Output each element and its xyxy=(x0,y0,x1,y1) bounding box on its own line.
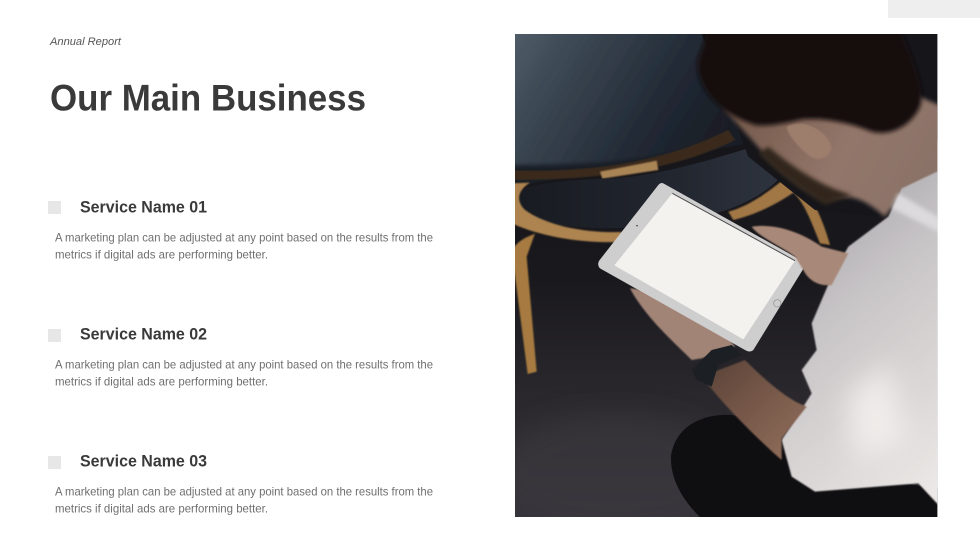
marker 01 xyxy=(48,201,61,214)
description 01: metrics if digital ads are performing better. xyxy=(55,248,268,262)
corner tab xyxy=(888,0,980,18)
watch xyxy=(692,345,742,387)
hair xyxy=(696,34,924,136)
service item 02 xyxy=(48,326,433,388)
man body xyxy=(671,34,938,517)
heading 01: Service Name 01 xyxy=(80,198,207,216)
beard xyxy=(758,147,852,205)
description 02: A marketing plan can be adjusted at any point based on the results from the xyxy=(55,358,433,372)
service item 01 xyxy=(48,198,433,262)
tablet xyxy=(598,183,807,351)
upper hand xyxy=(752,226,848,285)
description 02: metrics if digital ads are performing better. xyxy=(55,374,268,388)
description 02 xyxy=(55,358,433,388)
marker 03 xyxy=(48,456,61,469)
heading 02: Service Name 02 xyxy=(80,326,207,344)
heading 03: Service Name 03 xyxy=(80,452,207,470)
ear xyxy=(787,123,832,159)
lower hand xyxy=(630,288,735,360)
description 01 xyxy=(55,230,433,262)
marker 02 xyxy=(48,329,61,342)
title: Our Main Business xyxy=(50,78,366,118)
dark backdrop behind head xyxy=(702,34,938,210)
description 03: A marketing plan can be adjusted at any point based on the results from the xyxy=(55,484,433,498)
description 03 xyxy=(55,484,433,516)
carpet light patch xyxy=(562,436,668,444)
description 03: metrics if digital ads are performing better. xyxy=(55,502,268,516)
photo: man holding a tablet xyxy=(515,34,938,517)
forearm xyxy=(702,360,807,460)
dark trousers xyxy=(671,415,938,517)
neck and face xyxy=(722,93,958,217)
chair xyxy=(488,10,830,374)
service item 03 xyxy=(48,452,433,516)
shirt xyxy=(781,170,938,505)
eyebrow: Annual Report: Annual Report xyxy=(49,36,122,48)
description 01: A marketing plan can be adjusted at any point based on the results from the xyxy=(55,230,433,244)
